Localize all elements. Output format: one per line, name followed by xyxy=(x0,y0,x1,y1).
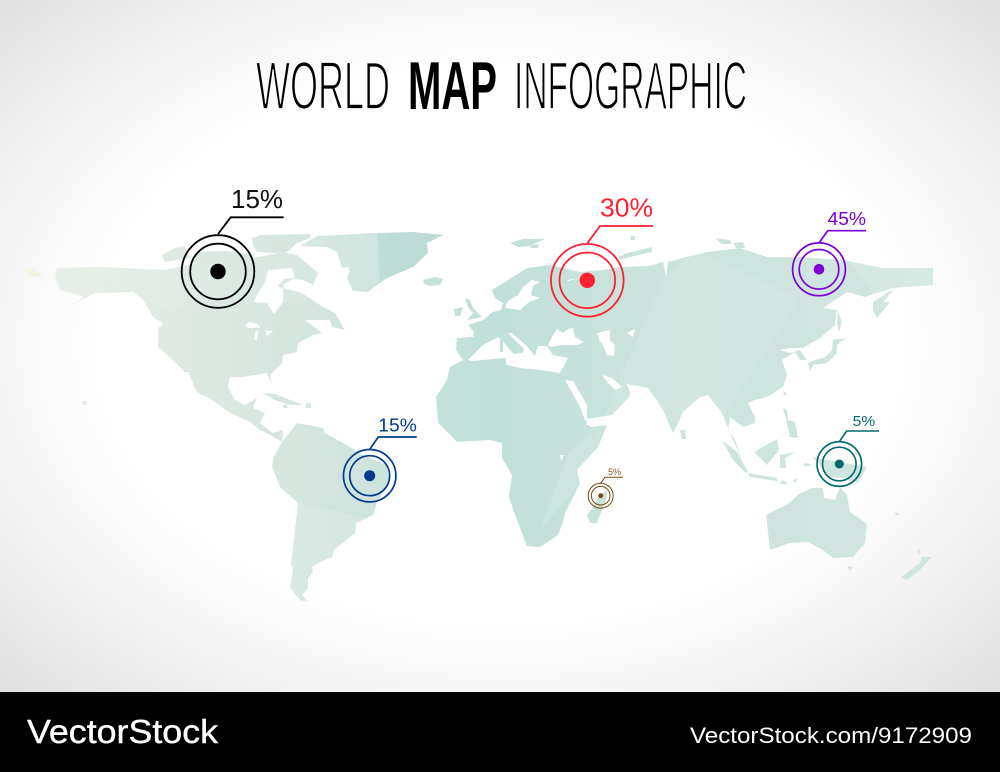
continent: Greenland xyxy=(300,232,443,292)
continent: Africa xyxy=(436,352,607,547)
callout: 30% red: 30% xyxy=(600,193,653,223)
world map xyxy=(24,232,933,602)
continent: Australia xyxy=(766,487,867,558)
text: INFOGRAPHIC xyxy=(514,48,747,124)
continent: South America xyxy=(272,423,389,602)
title xyxy=(256,48,747,124)
seas and lakes cut out of the map xyxy=(153,267,635,461)
callout: 15% black xyxy=(182,184,284,308)
Sardinia xyxy=(500,340,503,352)
callout: 5% brown: 5% xyxy=(608,467,621,477)
callout: 5% teal xyxy=(817,414,879,486)
map facets xyxy=(378,232,443,283)
callout: 5% brown xyxy=(588,467,623,508)
continent: North America xyxy=(55,252,345,442)
callout: 30% red xyxy=(551,193,653,317)
callout: 15% black: 15% xyxy=(231,184,283,214)
footer brand: VectorStock xyxy=(27,714,218,751)
callout: 45% purple: 45% xyxy=(828,208,866,229)
title: MAP xyxy=(408,48,497,124)
continent: Eurasia xyxy=(456,248,933,460)
islands: Tasmania, New Zealand, New Caledonia xyxy=(847,511,932,580)
footer image id: VectorStock.com/9172909 xyxy=(690,723,972,748)
callout: 5% teal: 5% xyxy=(853,414,875,430)
callout: 15% navy: 15% xyxy=(378,415,417,436)
footer bar xyxy=(0,692,1000,772)
islands xyxy=(24,234,895,523)
callout: 15% navy xyxy=(344,415,417,502)
callout: 45% purple xyxy=(793,208,866,296)
title: WORLD xyxy=(256,48,390,124)
